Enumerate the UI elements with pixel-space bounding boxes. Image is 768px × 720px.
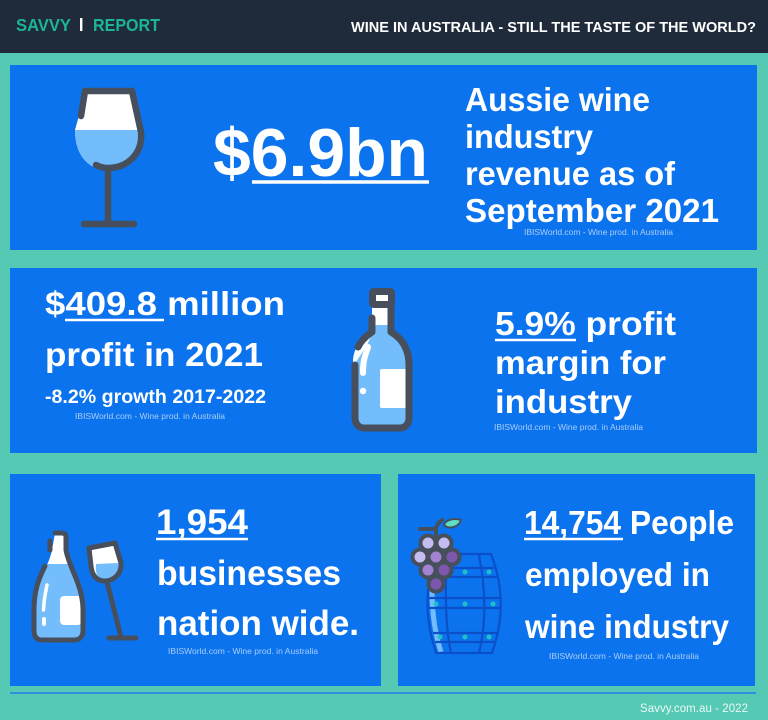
icon: wine glass [75,91,142,224]
source note: IBISWorld.com - Wine prod. in Australia [524,227,673,237]
panel: revenue [10,65,757,250]
icon: wine bottle [353,292,411,429]
source note: IBISWorld.com - Wine prod. in Australia [75,411,225,421]
icon: barrel [427,554,501,653]
margin text: 5.9% profit [495,305,676,342]
profit text: -8.2% growth 2017-2022 [45,387,266,408]
revenue description [465,81,719,229]
profit text [45,285,285,408]
margin text: industry [495,383,633,420]
brand logo: SAVVY [16,15,71,35]
profit text: $409.8 million [45,285,285,322]
icon: bottle and glass [33,533,136,640]
source note: IBISWorld.com - Wine prod. in Australia [494,422,643,432]
icon: grapes [412,519,461,592]
employment text: 14,754 People [524,504,734,541]
profit text: profit in 2021 [45,336,263,373]
source note: IBISWorld.com - Wine prod. in Australia [549,651,699,661]
brand logo: REPORT [93,15,160,35]
revenue figure: $6.9bn [213,115,428,191]
margin text [495,305,676,420]
margin text: margin for [495,344,666,381]
businesses text: businesses [157,554,341,593]
employment text: employed in [525,556,710,593]
header title: WINE IN AUSTRALIA - STILL THE TASTE OF THE WORLD? [351,19,756,36]
employment text: wine industry [524,608,730,645]
employment text [524,504,734,645]
revenue description: revenue as of [465,155,676,192]
businesses text [156,503,359,643]
panel: businesses [10,474,381,686]
panel: employment [398,474,755,686]
header bar [0,0,768,53]
revenue description: Aussie wine [465,81,650,118]
brand logo [16,15,160,35]
revenue description: September 2021 [465,192,719,229]
businesses text: 1,954 [156,503,249,542]
revenue description: industry [465,118,594,155]
panel: profit [10,268,757,453]
businesses text: nation wide. [157,604,359,643]
source note: IBISWorld.com - Wine prod. in Australia [168,646,318,656]
icon: barrel and grapes [412,519,501,653]
footer credit: Savvy.com.au - 2022 [640,703,748,715]
